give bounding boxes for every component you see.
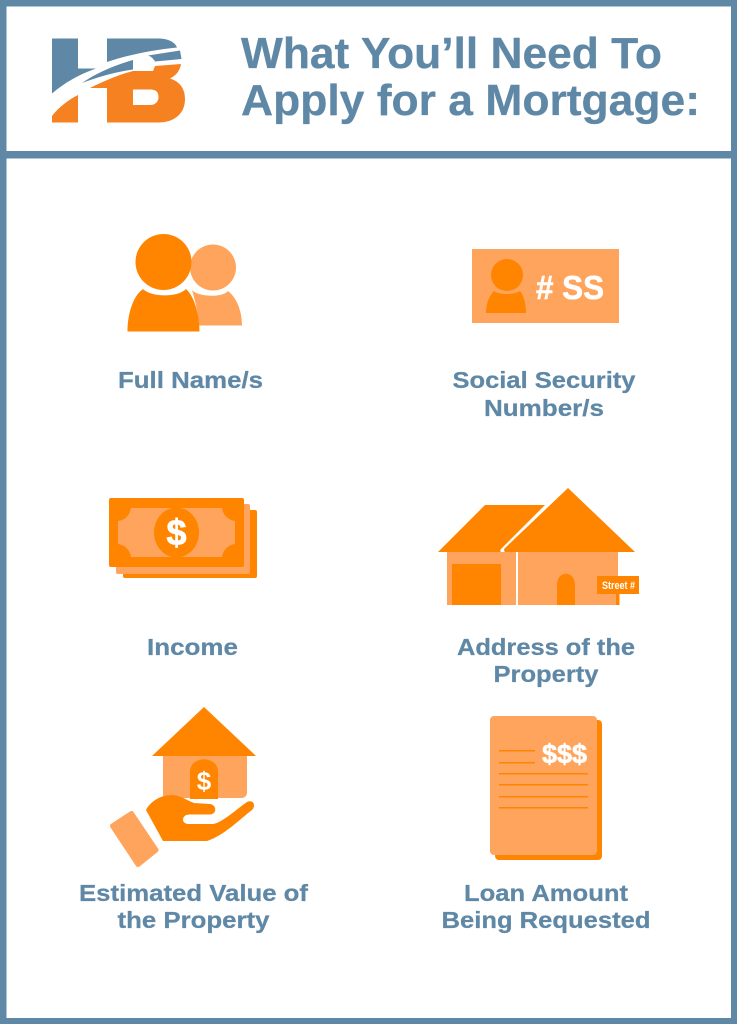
icon: social security card: # SS: [536, 269, 604, 306]
logo: [52, 38, 185, 122]
icon: house with street sign: [438, 488, 639, 605]
icon: two people: [128, 234, 242, 332]
icon: hand holding house: [112, 707, 256, 864]
label: full name: Full Name/s: [118, 367, 263, 393]
icon: hand holding house: $: [197, 766, 212, 796]
icon: social security card: [472, 249, 619, 323]
title: [241, 29, 700, 125]
label: income: Income: [147, 634, 238, 660]
label: estimated value: [79, 880, 308, 933]
icon: house with street sign: Street #: [602, 580, 635, 592]
label: loan amount: [442, 880, 650, 933]
icon: loan document: $$$: [542, 739, 587, 769]
label: address of the property: Property: [494, 661, 599, 687]
icon: money stack: $: [166, 512, 187, 553]
title: What You’ll Need To: [241, 29, 662, 78]
label: social security number: [452, 367, 636, 421]
label: estimated value: Estimated Value of: [79, 880, 308, 906]
label: estimated value: the Property: [118, 907, 270, 933]
label: address of the property: Address of the: [457, 634, 635, 660]
title: Apply for a Mortgage:: [241, 76, 700, 125]
label: social security number: Number/s: [484, 395, 604, 421]
label: loan amount: Being Requested: [442, 907, 650, 933]
icon: loan document: [490, 716, 602, 860]
label: address of the property: [457, 634, 635, 687]
label: social security number: Social Security: [452, 367, 636, 393]
icon: money stack: [109, 498, 257, 578]
label: loan amount: Loan Amount: [464, 880, 628, 906]
